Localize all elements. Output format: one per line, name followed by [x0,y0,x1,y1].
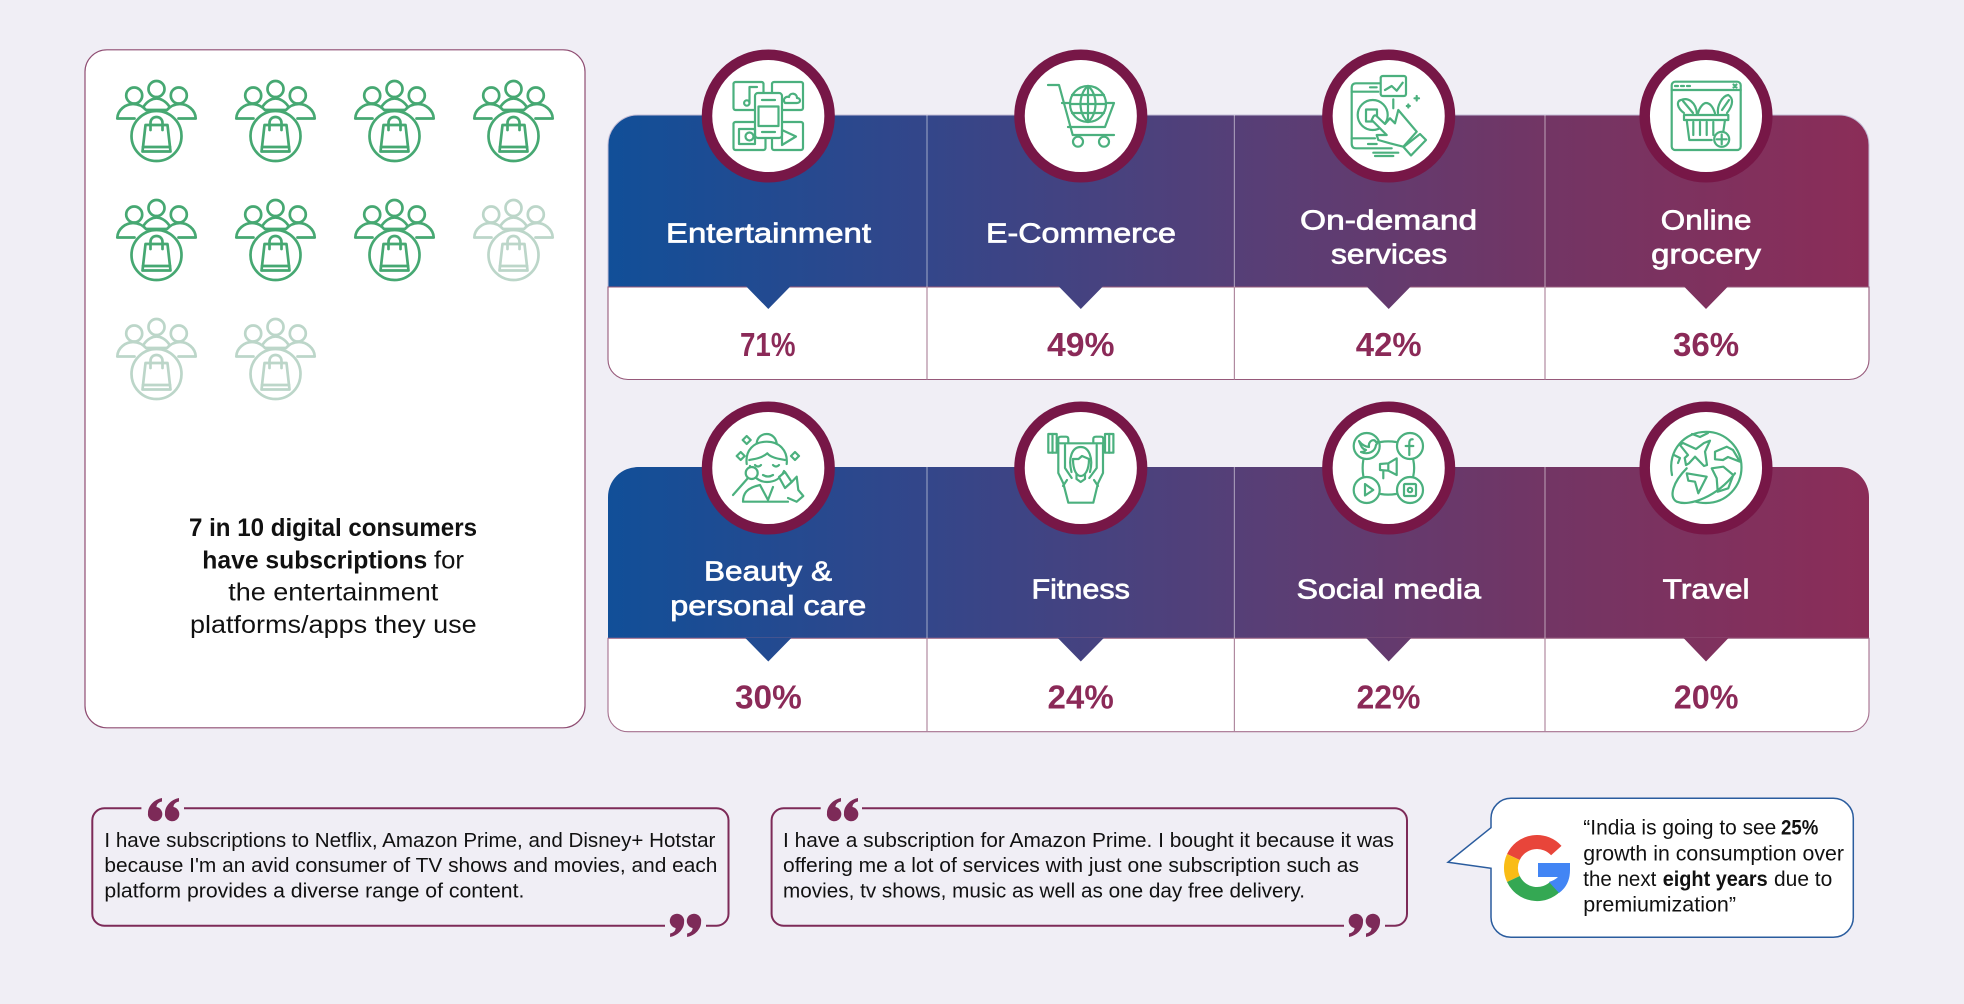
label: Entertainment [666,218,871,249]
value: 20% [1674,678,1738,715]
statement text: the entertainment [228,579,438,607]
icon: tapping phone [1352,76,1426,156]
panel: top row categories [608,55,1869,379]
callout: Google quote [1448,798,1853,937]
icon: closing quote mark [670,914,701,937]
quote text: due to [1774,868,1832,891]
category: Social media [1296,407,1481,715]
panel: bottom row categories [608,407,1869,732]
label: Beauty & [704,556,832,587]
category: Online grocery [1645,55,1767,363]
icon: opening quote mark [148,798,179,821]
label: Online [1661,204,1752,235]
quote text: growth in consumption over [1583,842,1844,865]
label: Fitness [1032,574,1130,605]
label: Social media [1296,574,1481,605]
icon: shopping cart with globe [1048,85,1114,147]
icon: opening quote mark [827,798,858,821]
category: E-Commerce [986,55,1176,363]
quote text [783,829,1394,902]
label [670,556,866,621]
value: 22% [1356,678,1420,715]
statement text: for [434,546,464,574]
testimonial 2 [772,798,1407,937]
label: Travel [1663,574,1750,605]
statement text [189,514,477,639]
icon: Google G logo [1511,842,1570,894]
icon: entertainment [734,82,803,150]
label: services [1331,238,1447,269]
icon: fitness [1048,434,1113,503]
label: E-Commerce [986,218,1176,249]
icon: globe with plane [1671,432,1742,503]
label [1651,204,1761,269]
value: 42% [1356,326,1422,363]
value: 49% [1047,326,1115,363]
quote text [104,829,717,902]
quote text: offering me a lot of services with just one subscription such as [783,854,1359,877]
value: 71% [740,326,796,363]
label: On-demand [1300,204,1477,235]
quote text: eight years [1663,868,1768,891]
icon: beauty [733,434,803,502]
category: Fitness [1020,407,1142,715]
panel: 7 in 10 consumers [85,50,585,728]
testimonial 1 [92,798,729,937]
statement text: 7 in 10 digital consumers [189,514,477,542]
quote text: movies, tv shows, music as well as one day free delivery. [783,880,1305,902]
quote text: the next [1583,868,1656,891]
quote text: I have subscriptions to Netflix, Amazon Prime, and Disney+ Hotstar [104,829,716,852]
category: Entertainment [666,55,871,363]
label: personal care [670,590,866,621]
quote text: premiumization” [1583,894,1736,917]
quote text: because I'm an avid consumer of TV shows and movies, and each [104,854,717,877]
quote text: 25% [1781,816,1819,839]
label: grocery [1651,238,1761,269]
icon: closing quote mark [1349,914,1380,937]
quote text: platform provides a diverse range of content. [104,880,524,902]
value: 24% [1048,678,1114,715]
value: 30% [735,678,802,715]
statement text: platforms/apps they use [190,611,477,639]
pictogram: 7 of 10 people icons highlighted [117,81,553,399]
label [1300,204,1477,269]
icon: social media [1354,433,1423,503]
quote text [1583,816,1844,917]
statement text: have subscriptions [202,546,427,574]
category: Travel [1645,407,1767,715]
quote text: I have a subscription for Amazon Prime. I bought it because it was [783,829,1394,852]
quote text: “India is going to see [1583,816,1776,839]
category: On-demand services [1300,55,1477,363]
category: Beauty and personal care [670,407,866,715]
icon: online grocery basket [1672,82,1741,150]
value: 36% [1673,326,1739,363]
